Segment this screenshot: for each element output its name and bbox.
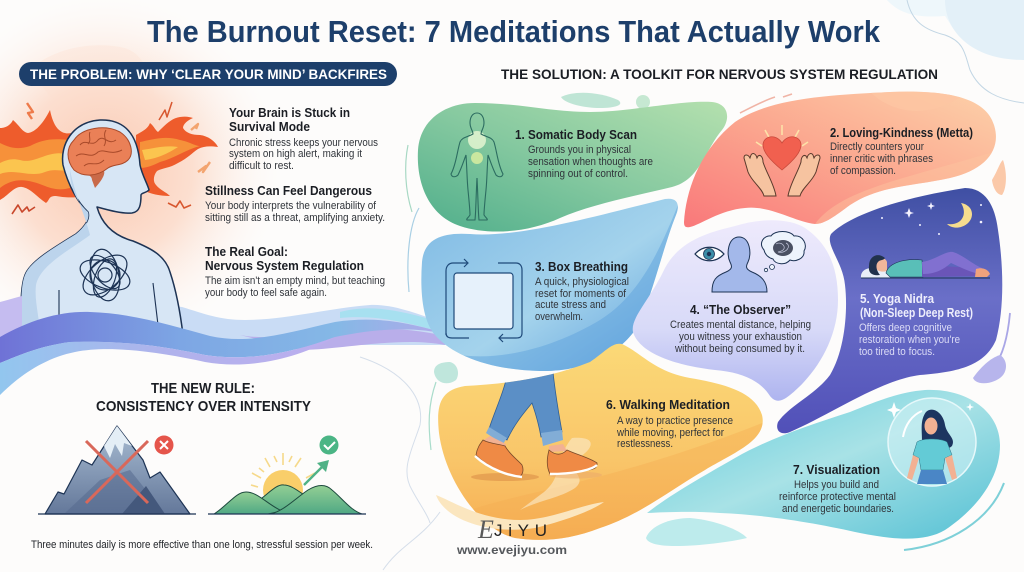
icon: thought cloud — [762, 232, 805, 272]
icon: tangled knot — [76, 247, 134, 303]
section banner: the problem — [19, 62, 397, 86]
text block: survival mode — [229, 105, 378, 172]
panel: 3 box breathing: overwhelm. — [535, 311, 583, 323]
caption: three minutes daily: Three minutes daily is more effective than one long, stressful session per week. — [31, 539, 373, 551]
icon: gentle hills with sunrise — [208, 436, 366, 514]
icon: observing figure — [712, 237, 767, 292]
wave band — [0, 296, 450, 395]
text block: real goal: The Real Goal: — [205, 244, 288, 259]
logo: evejiyu: www.evejiyu.com — [456, 545, 567, 557]
icon: brain — [68, 128, 131, 188]
panel: 6 walking meditation: 6. Walking Meditation — [606, 397, 730, 412]
panel: 2 loving-kindness: 2. Loving-Kindness (Metta) — [830, 125, 973, 140]
human silhouette — [20, 120, 183, 335]
icon: crescent moon — [947, 203, 972, 228]
text block: survival mode: Chronic stress keeps your nervous — [229, 137, 378, 149]
panel: 6 walking meditation — [438, 344, 770, 545]
text block: real goal: The aim isn't an empty mind, but teaching — [205, 275, 385, 287]
background corner shapes — [30, 0, 1024, 110]
panel: 2 loving-kindness: of compassion. — [830, 165, 896, 177]
icon: crossed-out mountain — [38, 426, 196, 514]
icon: heart in hands — [744, 125, 820, 196]
sparks — [12, 102, 210, 214]
text block: stillness: Your body interprets the vulnerability of — [205, 200, 376, 212]
panel: 1 somatic body scan: spinning out of control. — [528, 168, 628, 180]
section banner: the problem: THE PROBLEM: WHY ‘CLEAR YOUR MIND’ BACKFIRES — [30, 67, 387, 82]
panel: 5 yoga nidra: (Non-Sleep Deep Rest) — [860, 305, 973, 320]
logo: evejiyu: JiYU — [494, 521, 547, 540]
text block: survival mode: system on high alert, making it — [229, 148, 362, 160]
text block: stillness: Stillness Can Feel Dangerous — [205, 183, 372, 198]
text block: survival mode: Survival Mode — [229, 119, 310, 134]
text block: real goal — [205, 244, 385, 299]
panel: 1 somatic body scan: sensation when thoughts are — [528, 156, 653, 168]
cream swoosh — [436, 495, 604, 530]
panel: 7 visualization: reinforce protective mental — [779, 491, 896, 503]
heading: the new rule — [96, 380, 311, 415]
panel: 5 yoga nidra: too tired to focus. — [859, 346, 935, 358]
panel: 3 box breathing — [421, 199, 680, 380]
icon: breathing square — [446, 259, 522, 342]
panel: 2 loving-kindness — [684, 90, 1000, 230]
panel: 3 box breathing: 3. Box Breathing — [535, 259, 628, 274]
text block: survival mode: difficult to rest. — [229, 160, 294, 172]
heading: the solution: THE SOLUTION: A TOOLKIT FOR NERVOUS SYSTEM REGULATION — [501, 67, 938, 82]
panel: 3 box breathing: A quick, physiological — [535, 276, 629, 288]
flames right — [136, 117, 218, 196]
panel: 4 the observer: without being consumed by it. — [674, 343, 805, 355]
icon: reclining person — [861, 252, 990, 278]
text block: stillness: sitting still as a threat, amplifying anxiety. — [205, 212, 385, 224]
panel: 5 yoga nidra: 5. Yoga Nidra — [860, 291, 935, 306]
panel: 3 box breathing: reset for moments of — [535, 288, 626, 300]
flames left — [0, 110, 78, 203]
title: The Burnout Reset: 7 Meditations That Actually Work — [147, 14, 881, 49]
panel: 5 yoga nidra: Offers deep cognitive — [859, 322, 952, 334]
heading: the new rule: THE NEW RULE: — [151, 380, 255, 397]
panel: 2 loving-kindness: inner critic with phrases — [830, 153, 933, 165]
panel: 7 visualization: and energetic boundaries. — [782, 503, 894, 515]
icon: person in protective bubble — [887, 398, 976, 486]
logo: evejiyu: E — [477, 515, 494, 544]
heat glow — [0, 0, 300, 340]
heading: the new rule: CONSISTENCY OVER INTENSITY — [96, 398, 311, 415]
panel: 2 loving-kindness: Directly counters your — [830, 141, 924, 153]
panel: 6 walking meditation: A way to practice presence — [617, 415, 733, 427]
icon: walking legs — [471, 372, 602, 481]
panel: 5 yoga nidra — [777, 188, 1002, 433]
text block: real goal: Nervous System Regulation — [205, 258, 364, 273]
panel: 4 the observer — [633, 220, 838, 401]
panel: 1 somatic body scan — [418, 102, 727, 232]
icon: stars — [881, 202, 982, 235]
panel: 6 walking meditation: while moving, perfect for — [616, 427, 724, 439]
text block: survival mode: Your Brain is Stuck in — [229, 105, 350, 120]
panel: 5 yoga nidra: restoration when you're — [859, 334, 960, 346]
logo: evejiyu — [456, 515, 567, 557]
icon: eye — [695, 247, 724, 261]
panel: 4 the observer: Creates mental distance, helping — [670, 319, 811, 331]
panel: 1 somatic body scan: Grounds you in physical — [528, 144, 631, 156]
text block: real goal: your body to feel safe again. — [205, 287, 327, 299]
decorative blobs — [434, 93, 1006, 546]
text block: stillness — [205, 183, 385, 224]
panel: 7 visualization: 7. Visualization — [793, 462, 880, 477]
icon: body outline — [451, 113, 503, 220]
panel: 7 visualization — [647, 390, 1000, 539]
decorative thin lines — [360, 94, 1010, 570]
panel: 4 the observer: you witness your exhaustion — [679, 331, 802, 343]
wave back band — [0, 295, 450, 345]
panel: 3 box breathing: acute stress and — [535, 299, 606, 311]
panel: 6 walking meditation: restlessness. — [617, 438, 673, 450]
panel: 1 somatic body scan: 1. Somatic Body Scan — [515, 127, 637, 142]
panel: the problem — [0, 0, 450, 345]
panel: 7 visualization: Helps you build and — [794, 479, 879, 491]
panel: 4 the observer: 4. “The Observer” — [690, 302, 791, 317]
